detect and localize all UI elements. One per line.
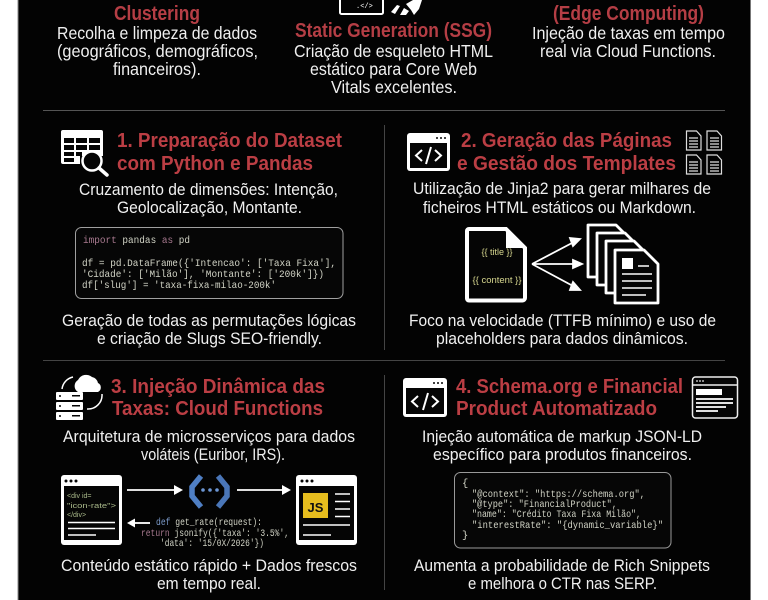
text: SSG description	[294, 41, 493, 97]
text: clustering description	[57, 23, 258, 79]
code block: pandas: 'Cidade': ['Milão'], 'Montante': ['200k']})	[82, 269, 324, 281]
icon: template document	[467, 228, 526, 300]
text: panel 3 intro	[63, 428, 355, 464]
heading: panel 4: Product Automatizado	[456, 397, 657, 420]
text: clustering description: (geográficos, demográficos,	[57, 41, 258, 61]
code block: pandas	[76, 228, 343, 298]
icon: static page browser	[61, 475, 122, 545]
code block: JSON-LD: {	[462, 478, 468, 490]
icon: cloud and servers	[56, 375, 102, 420]
icon: template document: {{ content }}	[472, 275, 522, 285]
code block: JSON-LD: "@context": "https://schema.org",	[472, 489, 645, 501]
heading: panel 3: 3. Injeção Dinâmica das	[111, 375, 325, 398]
heading: panel 2: 2. Geração das Páginas	[461, 129, 672, 152]
code block: pandas: df = pd.DataFrame({'Intencao': ['Taxa Fixa'],	[82, 258, 336, 270]
text: edge description	[532, 23, 725, 61]
code block: pandas: import pandas as pd	[83, 235, 190, 247]
icon: code window	[407, 133, 450, 171]
icon: template document: {{ title }}	[481, 247, 513, 257]
icon: JS browser	[296, 475, 357, 545]
text: panel 4 conclusion: e melhora o CTR nas SERP.	[468, 575, 657, 593]
code: cloud function: return jsonify({'taxa': '3.5%',	[141, 528, 289, 540]
code: cloud function: def get_rate(request):	[156, 517, 262, 529]
code block: JSON-LD: "interestRate": "{dynamic_variable}"	[472, 520, 663, 532]
icon: code window and rocket: .</>	[356, 3, 373, 11]
icon: rich snippet window	[692, 377, 738, 418]
icon: code window and rocket	[340, 0, 422, 15]
heading: clustering: Clustering	[114, 3, 200, 25]
icon: table with magnifier	[61, 130, 107, 175]
text: edge description: real via Cloud Functions.	[540, 41, 716, 61]
heading: panel 3: Taxas: Cloud Functions	[112, 397, 323, 420]
text: SSG description: Vitals excelentes.	[331, 77, 457, 97]
text: panel 2 intro: ficheiros HTML estáticos ou Markdown.	[423, 199, 696, 217]
text: panel 2 conclusion	[409, 312, 716, 348]
heading: panel 2	[457, 129, 676, 175]
icon: static page browser: <div id=	[67, 493, 92, 500]
text: panel 2 conclusion: Foco na velocidade (TTFB mínimo) e uso de	[409, 312, 716, 330]
text: panel 4 conclusion: Aumenta a probabilidade de Rich Snippets	[414, 557, 710, 575]
icon: stack of generated pages	[588, 225, 658, 303]
text: SSG description: estático para Core Web	[310, 59, 477, 79]
text: panel 1 intro	[79, 181, 338, 217]
code block: JSON-LD	[454, 472, 671, 548]
text: panel 3 intro: Arquitetura de microsserviços para dados	[63, 428, 355, 446]
text: panel 1 intro: Cruzamento de dimensões: Intenção,	[79, 181, 338, 199]
text: panel 2 intro: Utilização de Jinja2 para gerar milhares de	[413, 180, 711, 198]
text: panel 1 intro: Geolocalização, Montante.	[117, 199, 302, 217]
text: panel 4 intro: específico para produtos financeiros.	[433, 446, 692, 464]
text: panel 3 conclusion: em tempo real.	[157, 575, 261, 593]
code: cloud function: 'data': '15/0X/2026'})	[160, 538, 264, 550]
text: panel 1 conclusion	[62, 312, 356, 348]
panel: 3 cloud functions	[56, 375, 357, 593]
text: clustering description: financeiros).	[113, 59, 201, 79]
heading: static generation: Static Generation (SSG)	[295, 20, 492, 42]
icon: static page browser: "icon-rate">	[67, 503, 116, 510]
text: SSG description: Criação de esqueleto HTML	[294, 41, 493, 61]
icon: static page browser: </div>	[67, 512, 86, 519]
panel: 4 schema	[403, 375, 738, 593]
heading: edge computing: (Edge Computing)	[553, 3, 704, 25]
arrow: function to JS page	[237, 485, 291, 495]
panel: top right edge computing	[532, 3, 725, 61]
heading: panel 1	[117, 129, 342, 175]
text: panel 3 conclusion	[61, 557, 357, 593]
heading: panel 1: 1. Preparação do Dataset	[117, 129, 342, 152]
code block: JSON-LD: }	[462, 530, 468, 542]
text: panel 3 conclusion: Conteúdo estático rápido + Dados frescos	[61, 557, 357, 575]
arrows: template to pages	[532, 238, 582, 290]
text: panel 2 conclusion: placeholders para dados dinâmicos.	[436, 330, 688, 348]
text: panel 1 conclusion: Geração de todas as permutações lógicas	[62, 312, 356, 330]
code: cloud function	[141, 517, 289, 550]
icon: JS browser: JS	[308, 500, 324, 515]
panel: top centre SSG	[294, 0, 493, 97]
code block: JSON-LD: "@type": "FinancialProduct",	[472, 499, 617, 511]
heading: panel 1: com Python e Pandas	[117, 152, 313, 175]
heading: panel 3	[111, 375, 325, 420]
text: panel 4 intro: Injeção automática de markup JSON-LD	[422, 428, 702, 446]
heading: panel 2: e Gestão dos Templates	[457, 152, 676, 175]
text: edge description: Injeção de taxas em tempo	[532, 23, 725, 43]
icon: code window	[403, 378, 447, 417]
text: clustering description: Recolha e limpeza de dados	[57, 23, 257, 43]
text: panel 3 intro: voláteis (Euribor, IRS).	[141, 446, 285, 464]
panel: top left clustering	[57, 3, 258, 79]
code block: pandas: df['slug'] = 'taxa-fixa-milao-200k'	[82, 280, 276, 292]
code block: JSON-LD: "name": "Crédito Taxa Fixa Milão",	[472, 509, 641, 521]
text: panel 2 intro	[413, 180, 711, 217]
arrow: code back to browser	[127, 518, 150, 528]
text: panel 4 intro	[422, 428, 702, 464]
text: panel 1 conclusion: e criação de Slugs SEO-friendly.	[97, 330, 322, 348]
arrow: browser to function	[127, 485, 183, 495]
text: panel 4 conclusion	[414, 557, 710, 593]
icon: cloud function	[192, 476, 227, 507]
heading: panel 4: 4. Schema.org e Financial	[456, 375, 683, 398]
heading: panel 4	[456, 375, 683, 420]
panel: 2 pages and templates	[407, 129, 722, 348]
panel: 1 dataset	[61, 129, 356, 348]
icon: four small documents	[686, 131, 722, 174]
